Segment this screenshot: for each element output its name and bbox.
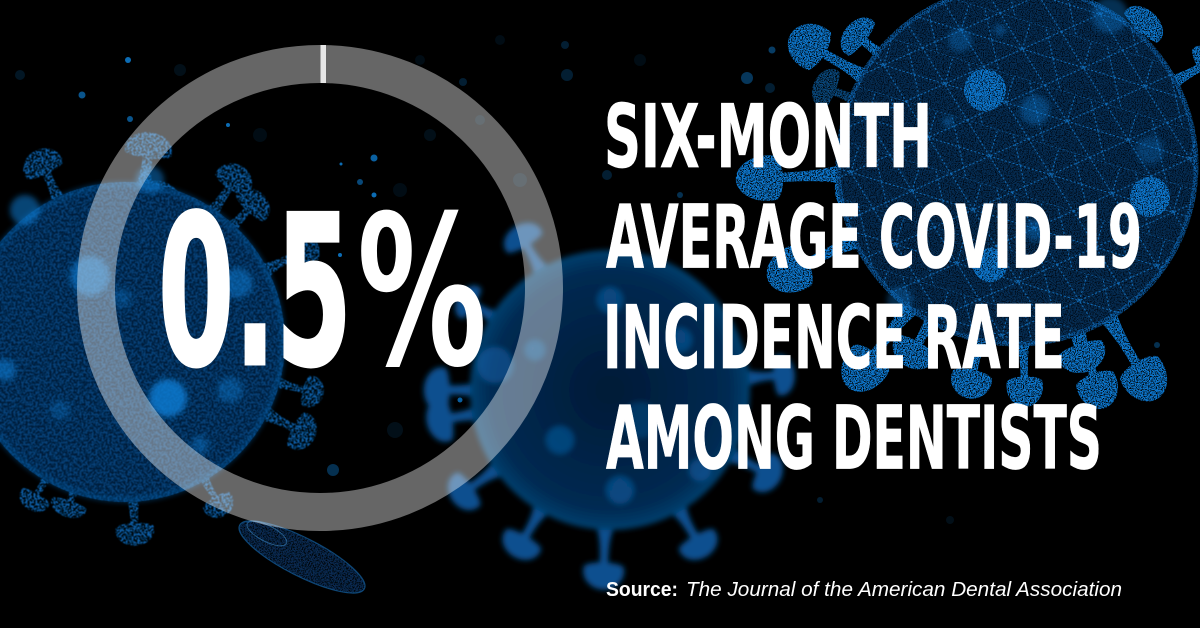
- ring highlighted slice: [320, 45, 326, 83]
- virus: middle blurred: [423, 216, 796, 590]
- background particles: [15, 35, 1160, 524]
- virus: left: [0, 129, 328, 547]
- heading: SIX-MONTH: [604, 86, 932, 188]
- bacteria capsule: [231, 508, 373, 606]
- source: The Journal of the American Dental Association: [686, 579, 1122, 601]
- big percentage value: 0.5: [158, 172, 352, 414]
- ring track: [96, 64, 544, 512]
- donut chart: 0.5% ring: [96, 45, 544, 512]
- heading: [603, 86, 1142, 490]
- virus: large sharp top right: [735, 0, 1200, 415]
- big percentage value: %: [357, 172, 487, 414]
- source: Source:: [606, 579, 678, 601]
